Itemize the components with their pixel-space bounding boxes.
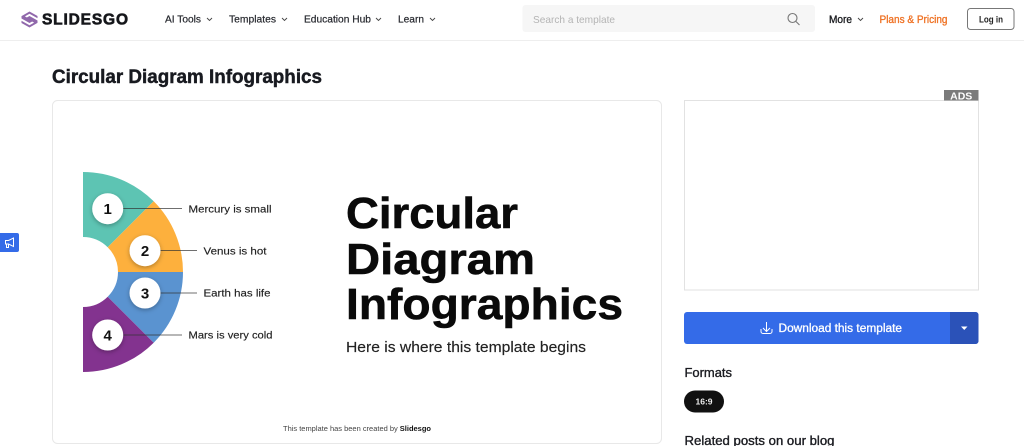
number badge 3: [130, 278, 160, 308]
number badge 4: 4: [104, 328, 113, 344]
connector lines: [107, 208, 197, 335]
segment labels: Venus is hot: [204, 246, 267, 258]
icon: logo mark: [21, 12, 38, 28]
search box: [522, 5, 815, 32]
panel: slide preview: [52, 100, 662, 444]
download button: [684, 312, 978, 344]
format pill: [684, 390, 724, 412]
navigation menu: Learn: [398, 14, 424, 26]
segment labels: [188, 204, 273, 342]
log in button: [968, 8, 1014, 30]
number badge 2: [130, 235, 160, 266]
plans and pricing link: Plans & Pricing: [880, 14, 948, 26]
format pill: 16:9: [695, 396, 713, 406]
icon: search: [788, 14, 800, 25]
logo: SLIDESGO: [42, 12, 128, 28]
panel: ad placeholder: [684, 90, 978, 290]
navigation menu: Templates: [229, 14, 276, 26]
page title: Circular Diagram Infographics: [52, 67, 322, 88]
number badge 2: 2: [141, 243, 149, 260]
segment labels: Mars is very cold: [188, 330, 273, 342]
search box: Search a template: [533, 14, 615, 26]
segment: orange: [108, 201, 183, 272]
more menu: More: [829, 14, 852, 26]
ads tag: [944, 90, 978, 102]
segment: purple: [83, 297, 154, 372]
navigation menu: [165, 14, 435, 26]
slide heading: Circular: [346, 189, 518, 238]
number badge 4: [92, 320, 123, 350]
segment labels: Earth has life: [204, 288, 271, 300]
slide heading: [346, 189, 623, 329]
slide heading: Diagram: [346, 235, 535, 284]
header bar: [0, 0, 1024, 40]
segment: teal: [83, 172, 154, 247]
navigation menu: AI Tools: [165, 14, 201, 26]
download button: Download this template: [778, 323, 902, 335]
slide subtitle: Here is where this template begins: [346, 339, 586, 356]
segment labels: Mercury is small: [188, 204, 272, 216]
formats heading: Formats: [684, 366, 732, 380]
navigation menu: Education Hub: [304, 14, 371, 26]
log in button: Log in: [979, 14, 1003, 26]
icon: megaphone: [6, 238, 14, 248]
icon: download: [761, 322, 772, 334]
slide heading: Infographics: [346, 280, 623, 329]
slide credit: This template has been created by Slidesgo: [283, 426, 431, 433]
ads tag: ADS: [950, 90, 972, 102]
number badge 1: 1: [104, 201, 112, 218]
feedback tab: [0, 233, 19, 252]
segment: blue: [108, 272, 183, 343]
number badge 1: [92, 193, 123, 224]
chart: semicircular diagram: [83, 172, 273, 372]
icon: caret: [961, 326, 968, 330]
number badge 3: 3: [141, 286, 149, 302]
